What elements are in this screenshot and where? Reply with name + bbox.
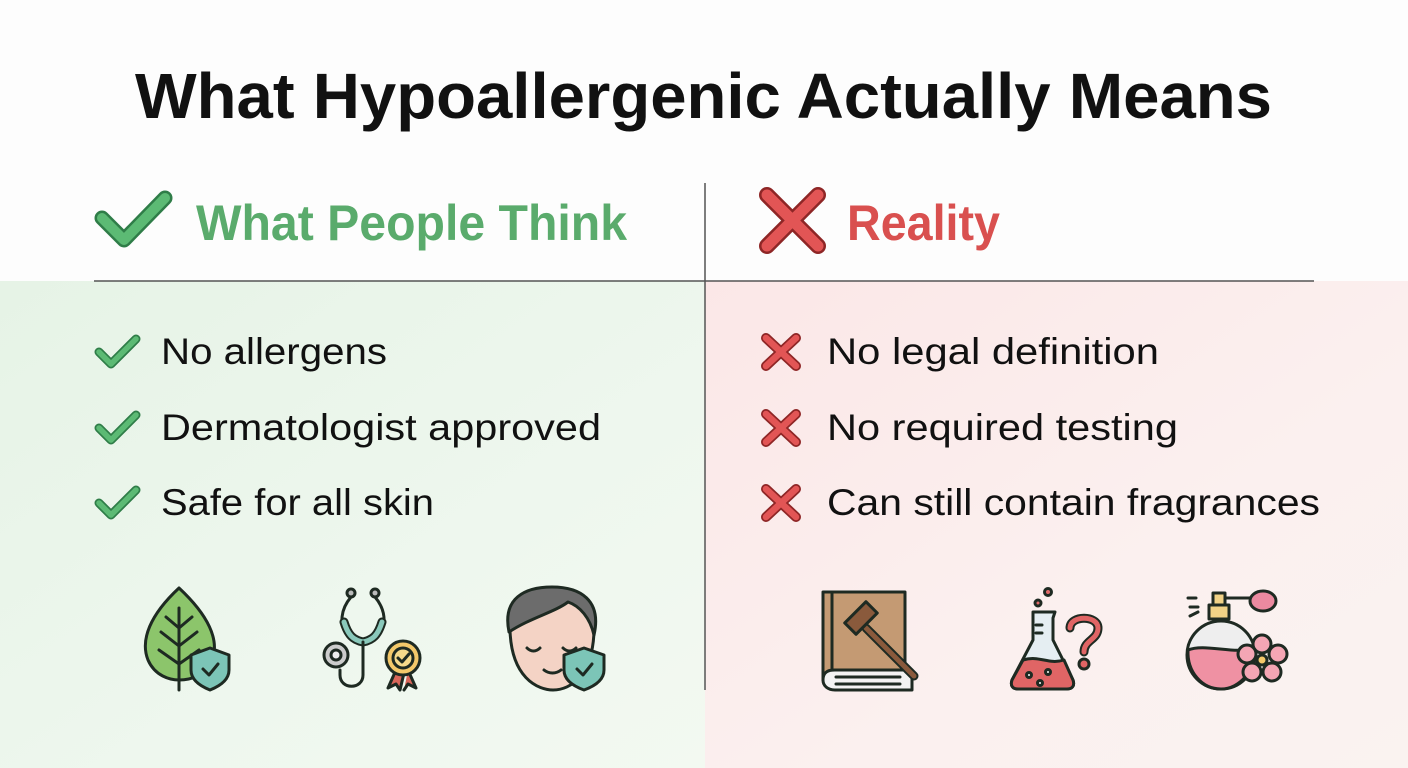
icon: stethoscope with badge	[324, 589, 420, 690]
icon: law book with gavel	[823, 592, 914, 690]
heading: reality: Reality	[847, 195, 1000, 251]
icon: perfume bottle	[1187, 591, 1287, 689]
list: reality: Can still contain fragrances	[827, 482, 1320, 523]
panel: what people think	[99, 195, 627, 690]
title: What Hypoallergenic Actually Means	[135, 60, 1272, 132]
icon: big check	[102, 198, 165, 240]
icon: face with shield	[508, 587, 604, 690]
icon: leaf with shield	[145, 588, 229, 690]
list: reality	[766, 331, 1320, 523]
panel: reality	[766, 195, 1320, 690]
list: people think: No allergens	[161, 331, 387, 372]
icon: big x	[767, 195, 818, 246]
list: people think	[99, 331, 601, 523]
list: reality: No required testing	[827, 407, 1178, 448]
icon: flask with question mark	[1011, 588, 1098, 689]
heading: what people think: What People Think	[196, 195, 627, 251]
list: people think: Dermatologist approved	[161, 407, 601, 448]
list: reality: No legal definition	[827, 331, 1159, 372]
list: people think: Safe for all skin	[161, 482, 434, 523]
